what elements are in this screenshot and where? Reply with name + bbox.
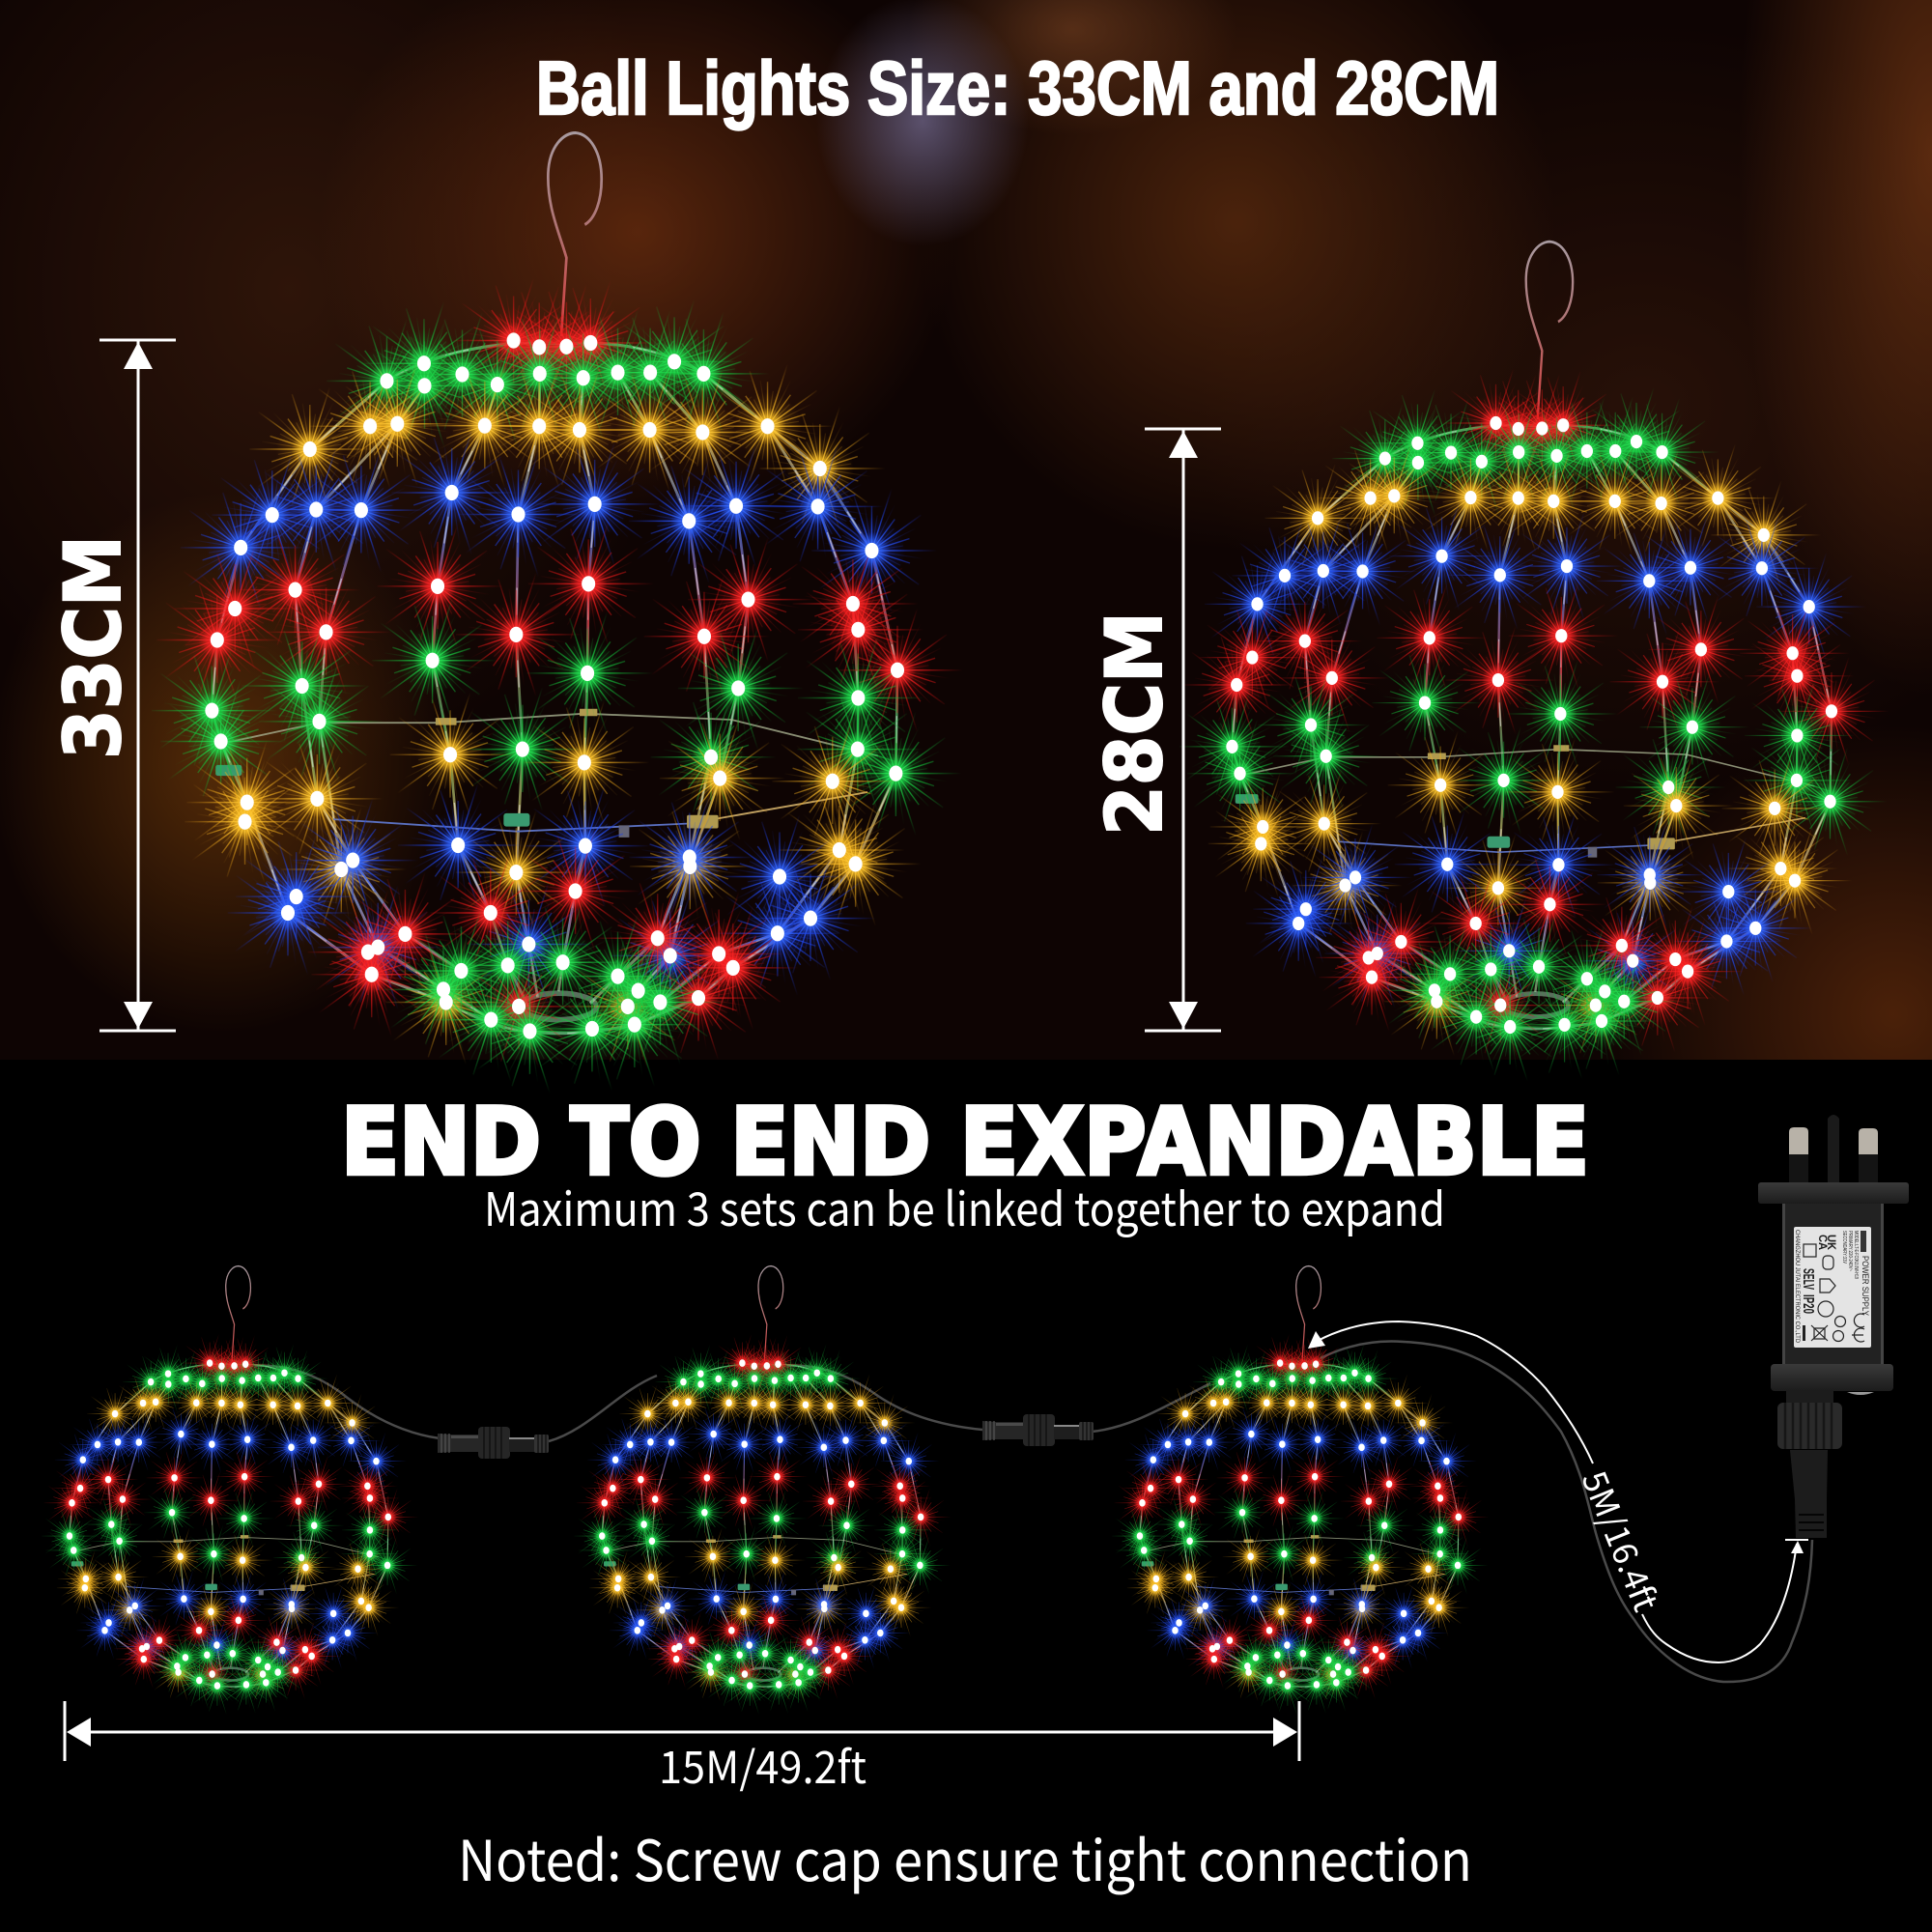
arrow: 5M cable length (1308, 1321, 1808, 1662)
heading: end to end expandable: END TO END EXPANDABLE (341, 1090, 1589, 1196)
ball light in chain 2 (574, 1266, 952, 1715)
power adapter plug: SECONDARY:31V (1841, 1231, 1847, 1264)
large ball light 33cm (152, 133, 963, 1093)
power adapter plug (1758, 1115, 1909, 1538)
ball light in chain 3 (1112, 1266, 1489, 1715)
note: Noted: Screw cap ensure tight connection (458, 1816, 1472, 1897)
background: blurred warm bokeh band (0, 0, 1932, 1060)
power adapter plug: CA (1816, 1235, 1830, 1250)
label 28CM: 28CM (1090, 611, 1179, 836)
subheading: Maximum 3 sets can be linked together to expand (484, 1172, 1445, 1239)
dimension arrow 33cm (99, 340, 176, 1031)
power adapter plug: PRIMARY:220-240V~ (1847, 1231, 1853, 1271)
dimension arrow 28cm (1145, 429, 1221, 1031)
small ball light 28cm (1179, 242, 1889, 1081)
power adapter plug: CHANGZHOU JUTAI ELECTRONIC CO.,LTD (1794, 1230, 1801, 1343)
label 15M/49.2ft: 15M/49.2ft (659, 1733, 867, 1797)
label 33CM: 33CM (48, 535, 138, 759)
power adapter plug: IP20 (1800, 1294, 1816, 1314)
linking cables (255, 1342, 1812, 1682)
connector 2 (982, 1414, 1094, 1446)
label 5M/16.4ft: 5M/16.4ft (1572, 1463, 1672, 1618)
power adapter plug: SELV (1800, 1268, 1816, 1290)
power adapter plug: POWER SUPPLY (1861, 1256, 1870, 1316)
power adapter plug: MODEL:LT-E-FC0N3.6W-H19 (1853, 1231, 1859, 1279)
ball light in chain 1 (42, 1266, 418, 1715)
title: Ball Lights Size: 33CM and 28CM (536, 45, 1499, 130)
connector 1 (438, 1427, 549, 1459)
total length arrow (65, 1701, 1299, 1761)
power adapter plug: UK (1825, 1235, 1838, 1250)
